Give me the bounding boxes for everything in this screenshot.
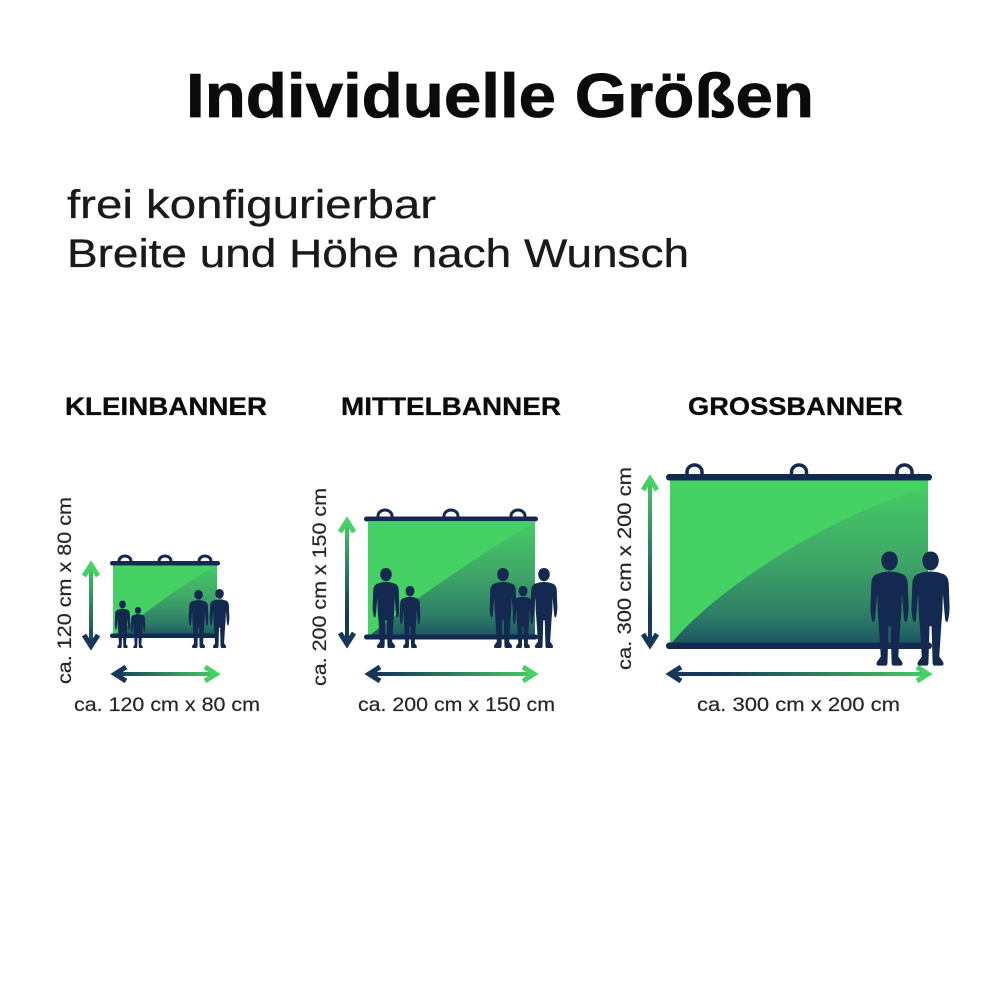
people [115,589,229,648]
vertical arrow [340,521,354,644]
horizontal dimension label: ca. 120 cm x 80 cm [74,694,260,716]
vertical dimension label: ca. 120 cm x 80 cm [54,497,76,684]
heading: Mittelbanner: MITTELBANNER [341,393,561,421]
title: Individuelle Größen [186,62,814,131]
horizontal arrow [670,667,928,681]
subtitle: Breite und Höhe nach Wunsch [67,232,689,276]
heading: Grossbanner: GROSSBANNER [688,393,903,421]
banner [110,556,220,638]
vertical dimension label: ca. 300 cm x 200 cm [614,467,636,670]
horizontal dimension label: ca. 300 cm x 200 cm [697,694,900,716]
panel: Kleinbanner [54,393,267,716]
panel: Mittelbanner [309,393,561,716]
subtitle: frei konfigurierbar [67,183,436,227]
heading: Kleinbanner: KLEINBANNER [65,393,267,421]
banner [666,465,932,649]
people [870,552,950,666]
subtitle [67,183,689,276]
vertical dimension label: ca. 200 cm x 150 cm [309,488,331,686]
people [373,568,557,648]
vertical arrow [643,479,657,645]
horizontal dimension label: ca. 200 cm x 150 cm [358,694,555,716]
horizontal arrow [115,667,216,681]
vertical arrow [84,565,98,646]
banner [364,510,538,640]
horizontal arrow [369,667,534,681]
panel: Grossbanner [614,393,950,716]
